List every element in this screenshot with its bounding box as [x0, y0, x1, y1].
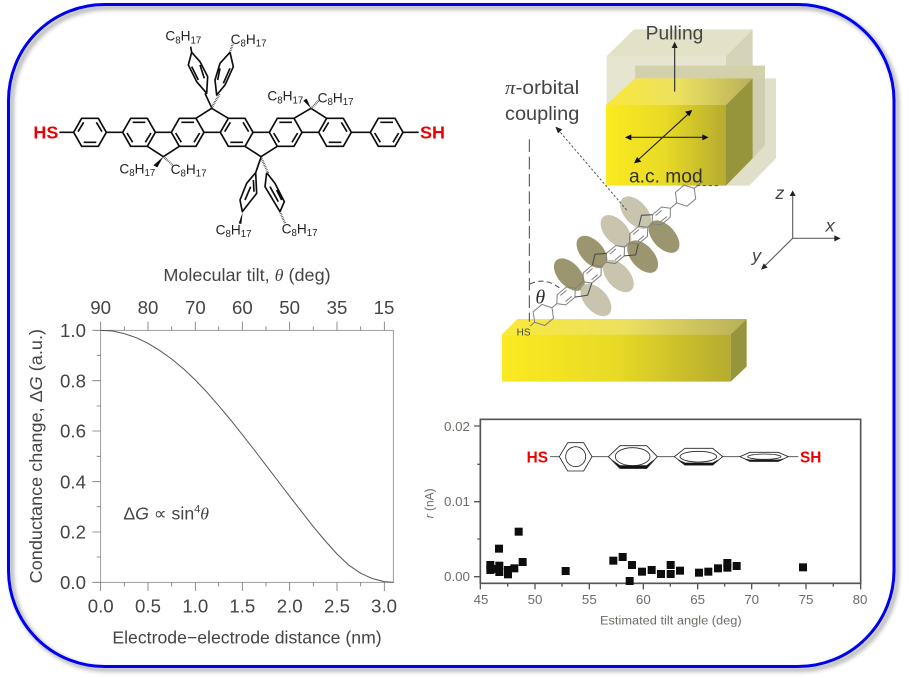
label: C8H17 bottom b: 17 — [307, 228, 318, 239]
left axis title: Conductance change, ΔG (a.u.) — [26, 329, 46, 583]
tilted molecule — [521, 171, 711, 336]
x axis numbers: 55 — [582, 592, 597, 607]
label: C8H17 lower left a: H — [135, 161, 144, 176]
label: C8H17 top right: 8 — [241, 39, 246, 50]
bottom axis numbers — [88, 596, 397, 617]
y axis numbers — [444, 419, 470, 584]
label: C8H17 bottom b: C — [282, 221, 292, 236]
bottom gold electrode — [502, 319, 747, 382]
tail at upper electrode — [697, 184, 719, 187]
formula: θ — [200, 504, 209, 523]
y axis numbers: 0.00 — [444, 569, 470, 584]
coordinate axes: y — [750, 246, 762, 266]
x axis numbers: 50 — [528, 592, 542, 607]
left axis numbers — [60, 320, 86, 593]
label: C8H17 lower left b: H — [186, 162, 196, 177]
panel: break-junction schematic — [502, 23, 841, 382]
label: HS: HS — [33, 122, 58, 142]
label: C8H17 top left: 8 — [175, 35, 181, 46]
x axis numbers: 75 — [799, 592, 813, 607]
conductance curve — [101, 330, 394, 582]
label: C8H17 bottom b: H — [297, 221, 307, 236]
label: C8H17 lower left a: 17 — [144, 168, 155, 179]
label: C8H17 lower left b: 8 — [181, 169, 186, 180]
top axis numbers: 15 — [374, 297, 394, 318]
pi-orbital coupling label — [505, 78, 579, 125]
left axis numbers: 0.4 — [60, 471, 86, 492]
label: C8H17 mid right b: C — [318, 90, 328, 105]
a.c. modulation arrows — [625, 110, 709, 163]
vertical dashed reference line — [528, 139, 531, 322]
y axis numbers: 0.01 — [444, 494, 470, 509]
pi-orbital coupling label: coupling — [505, 104, 579, 125]
label: C8H17 mid right a: 17 — [292, 95, 303, 106]
left axis numbers: 0.8 — [60, 370, 86, 391]
axis ticks — [474, 426, 861, 589]
molecule: large fused oligomer — [33, 29, 445, 240]
top axis numbers — [90, 297, 394, 318]
inset molecule with twisted rings — [550, 443, 798, 471]
x axis numbers — [474, 592, 867, 607]
top axis title: Molecular tilt, θ (deg) — [163, 265, 331, 285]
label: C8H17 mid right b: H — [333, 90, 343, 105]
dotted arrow to coupling label — [555, 127, 627, 210]
x axis numbers: 60 — [636, 592, 651, 607]
formula: ΔG ∝ sin — [123, 503, 193, 523]
x axis title: Estimated tilt angle (deg) — [600, 613, 742, 627]
left axis numbers: 1.0 — [60, 320, 86, 341]
top axis numbers: 70 — [185, 297, 206, 318]
label: C8H17 top right: C — [231, 32, 241, 47]
pulling arrow — [672, 42, 678, 92]
label: SH: SH — [420, 122, 445, 142]
label: C8H17 top right: 17 — [256, 39, 267, 50]
coordinate axes: x — [825, 216, 836, 236]
x axis numbers: 80 — [853, 592, 867, 607]
top gold electrode — [606, 78, 753, 186]
bottom axis numbers: 0.0 — [88, 596, 114, 617]
pi-orbital coupling label: π-orbital — [505, 78, 579, 99]
label: C8H17 lower left a: C — [119, 161, 129, 176]
axis ticks — [92, 322, 384, 591]
formula: 4 — [194, 504, 200, 516]
bottom axis numbers: 1.0 — [182, 596, 208, 617]
label: C8H17 mid right b: 8 — [328, 97, 333, 108]
aromatic backbone rings — [59, 108, 419, 157]
y axis title: r (nA) — [422, 488, 436, 518]
top axis numbers: 80 — [138, 297, 158, 318]
label: C8H17 bottom a: H — [231, 222, 241, 237]
left axis numbers: 0.2 — [60, 522, 86, 543]
HS label: HS — [517, 327, 531, 338]
Pulling label: Pulling — [646, 23, 703, 44]
bottom axis numbers: 2.0 — [277, 596, 303, 617]
label: C8H17 bottom b: 8 — [292, 228, 297, 239]
label: C8H17 bottom a: 8 — [226, 229, 231, 240]
solid wedges — [153, 99, 311, 224]
upper and lower phenyl substituents — [188, 47, 284, 212]
label: C8H17 top right: H — [246, 32, 256, 47]
x axis numbers: 70 — [744, 592, 759, 607]
label: C8H17 bottom a: C — [216, 222, 226, 237]
label: C8H17 top left: C — [165, 29, 175, 44]
panel: conductance chart — [26, 265, 397, 647]
top axis numbers: 35 — [327, 297, 347, 318]
x axis numbers: 65 — [690, 592, 705, 607]
panel: scatter plot — [422, 419, 867, 627]
left axis numbers: 0.6 — [60, 421, 86, 442]
a.c. mod label: a.c. mod — [629, 166, 703, 187]
label: C8H17 lower left b: 17 — [196, 169, 207, 180]
coordinate axes — [750, 183, 841, 270]
plot frame — [101, 330, 393, 582]
label: C8H17 lower left b: C — [171, 162, 181, 177]
plot frame — [480, 419, 861, 583]
label: C8H17 mid right b: 17 — [343, 97, 354, 108]
label: C8H17 top left: H — [181, 29, 190, 44]
bottom axis title: Electrode−electrode distance (nm) — [112, 627, 382, 647]
bottom axis numbers: 0.5 — [135, 596, 161, 617]
left axis numbers: 0.0 — [60, 572, 86, 593]
data points — [486, 528, 807, 585]
top axis numbers: 50 — [279, 297, 300, 318]
label: C8H17 top left: 17 — [190, 35, 201, 46]
label: C8H17 lower left a: 8 — [129, 168, 135, 179]
pi orbital lobes — [548, 191, 685, 322]
inset label HS: HS — [527, 449, 548, 466]
top axis numbers: 60 — [232, 297, 253, 318]
label: C8H17 mid right a: H — [283, 89, 292, 104]
theta label: θ — [535, 286, 545, 308]
label: C8H17 mid right a: 8 — [277, 95, 283, 106]
ghost electrode positions — [607, 29, 776, 186]
y axis numbers: 0.02 — [444, 419, 470, 434]
bottom axis numbers: 2.5 — [324, 596, 350, 617]
inset label SH: SH — [800, 449, 821, 466]
top axis numbers: 90 — [90, 297, 111, 318]
label: C8H17 mid right a: C — [267, 89, 277, 104]
coordinate axes: z — [774, 183, 784, 203]
x axis numbers: 45 — [474, 592, 488, 607]
tilt arc — [530, 281, 560, 288]
bottom axis numbers: 3.0 — [371, 596, 397, 617]
bottom axis numbers: 1.5 — [229, 596, 255, 617]
hashed wedges — [163, 44, 319, 223]
label: C8H17 bottom a: 17 — [241, 229, 252, 240]
